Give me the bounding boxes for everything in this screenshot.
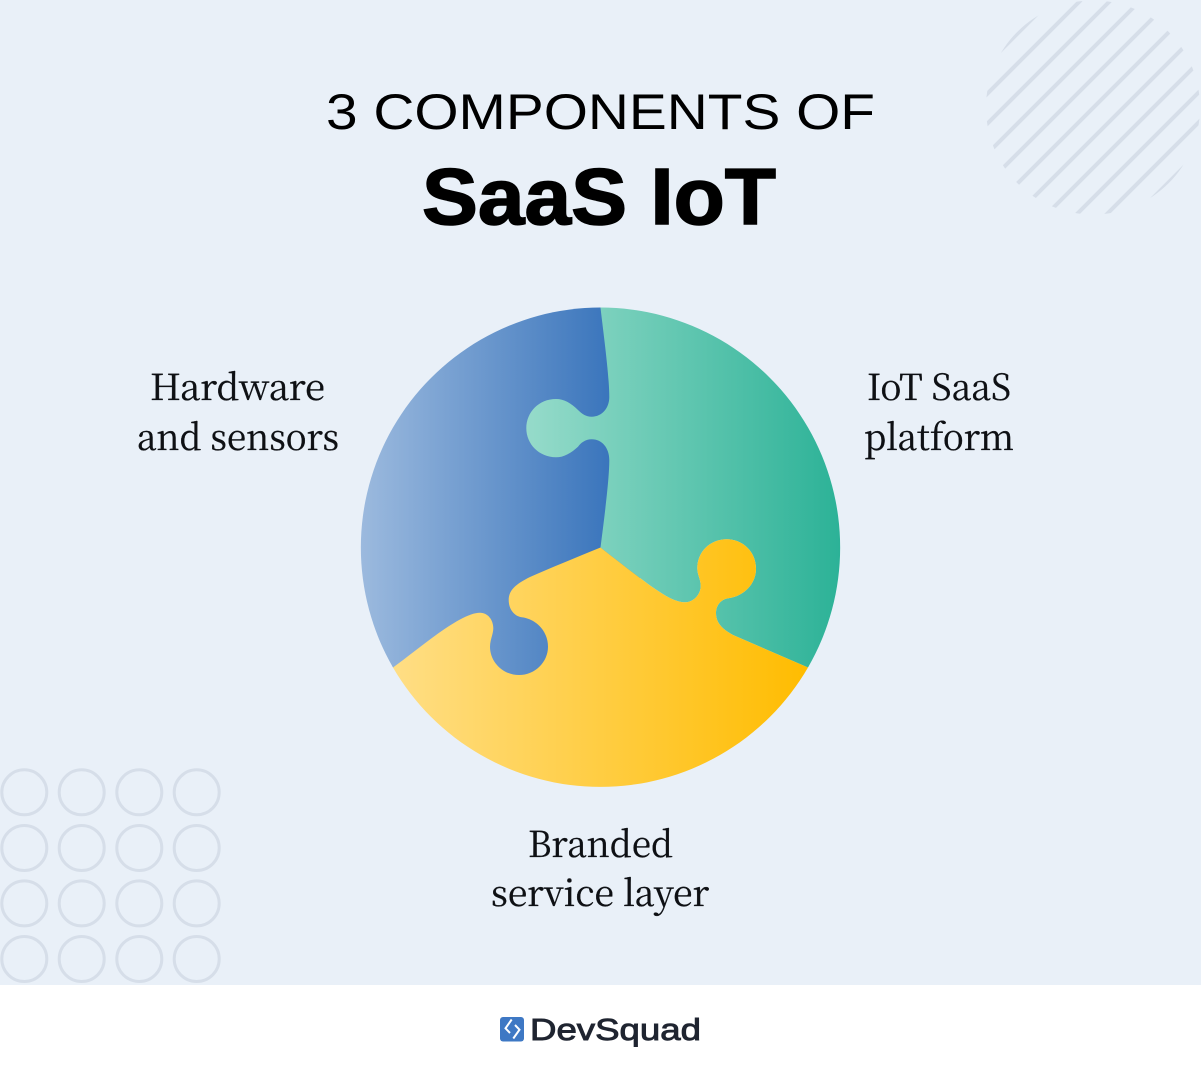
puzzle piece: branded service layer (yellow) xyxy=(393,539,808,787)
label: branded service layer xyxy=(491,817,709,917)
puzzle circle xyxy=(361,308,840,787)
icon: DevSquad mark xyxy=(500,1017,524,1042)
title line: SaaS IoT: SaaS IoT xyxy=(422,152,776,241)
puzzle piece: IoT SaaS platform (teal) xyxy=(526,308,840,668)
title line: 3 components of: 3 COMPONENTS OF xyxy=(326,84,875,140)
logo: DevSquad xyxy=(500,1012,701,1047)
decoration: striped circle xyxy=(986,1,1200,214)
label: IoT SaaS platform: IoT SaaS xyxy=(867,360,1011,411)
label: hardware and sensors xyxy=(137,360,339,461)
label: hardware and sensors: Hardware xyxy=(150,360,325,411)
label: branded service layer: service layer xyxy=(491,866,709,917)
wordmark: DevSquad xyxy=(530,1012,701,1047)
label: IoT SaaS platform: platform xyxy=(864,410,1014,461)
label: branded service layer: Branded xyxy=(528,817,673,868)
label: IoT SaaS platform xyxy=(864,360,1014,461)
decoration: circle grid xyxy=(2,770,219,982)
puzzle piece: hardware and sensors (blue) xyxy=(361,308,640,720)
label: hardware and sensors: and sensors xyxy=(137,410,339,461)
